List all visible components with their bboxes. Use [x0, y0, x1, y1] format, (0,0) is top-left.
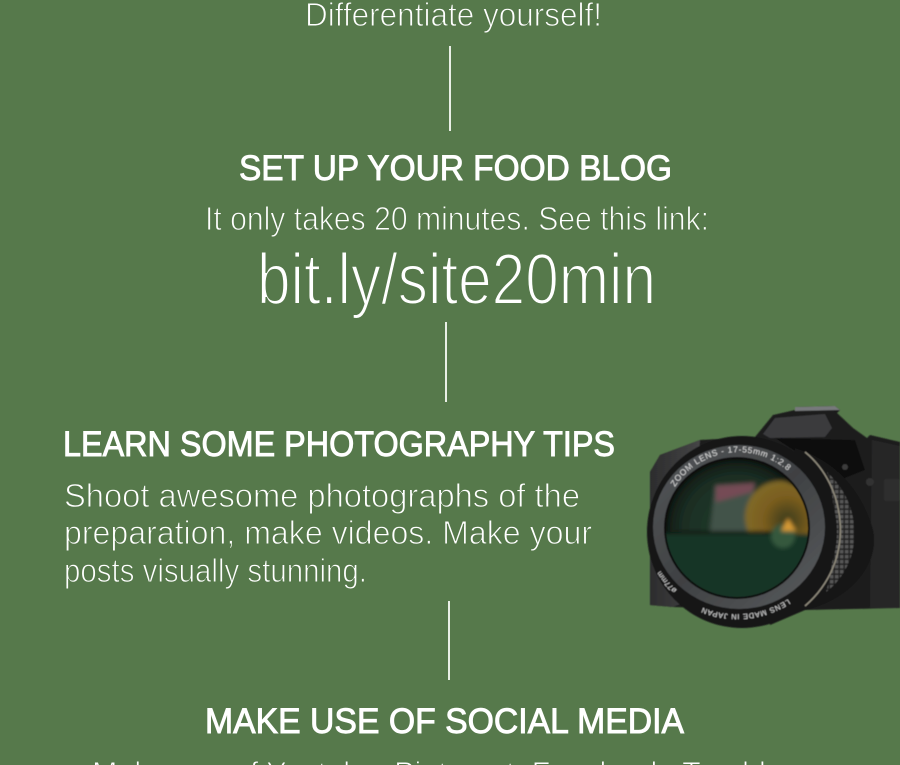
- camera body: [650, 406, 900, 610]
- connector line 2: [445, 322, 447, 402]
- text block: photography advice: posts visually stunning.: [64, 552, 367, 589]
- icon: camera: LENS MADE IN JAPAN: [700, 598, 791, 620]
- text: it only takes 20 minutes: It only takes 20 minutes. See this link:: [205, 200, 709, 237]
- text block: photography advice: Shoot awesome photographs of the: [64, 477, 580, 514]
- lens front ring: [647, 436, 837, 628]
- text block: photography advice: preparation, make videos. Make your: [64, 514, 592, 551]
- lens glass: [665, 459, 809, 598]
- text block: photography advice: [64, 477, 592, 589]
- lens lettering: ZOOM LENS - 17-55mm 1:2.8: [670, 446, 792, 488]
- heading: set up your food blog: SET UP YOUR FOOD BLOG: [239, 149, 672, 188]
- connector line 3: [448, 601, 450, 680]
- icon: camera: ø77mm: [657, 570, 678, 593]
- icon: camera: [646, 406, 900, 629]
- heading: learn some photography tips: LEARN SOME PHOTOGRAPHY TIPS: [63, 425, 615, 464]
- heading: make use of social media: MAKE USE OF SOCIAL MEDIA: [205, 702, 685, 741]
- link: bit.ly/site20min: bit.ly/site20min: [257, 240, 656, 320]
- connector line 1: [449, 46, 451, 131]
- lens barrel: [770, 448, 874, 625]
